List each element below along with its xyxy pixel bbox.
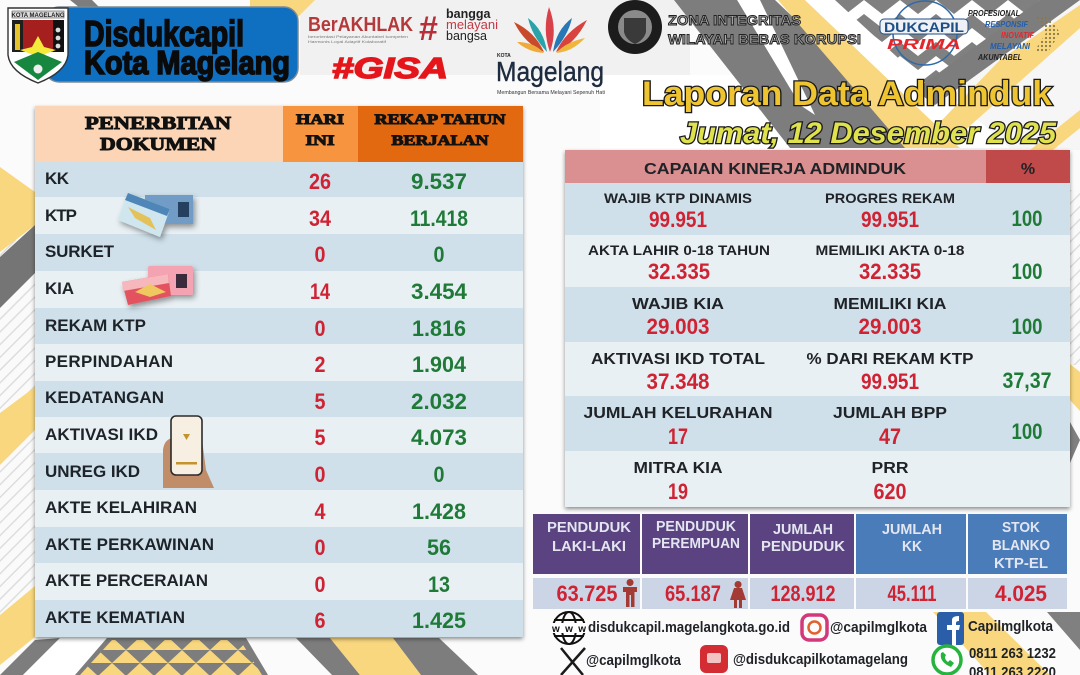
- row: KIA: [45, 279, 468, 304]
- subtitle: date: Jumat, 12 Desember 2025: [680, 117, 1057, 150]
- logo: Dukcapil Prima: PRIMA: [887, 36, 961, 53]
- row: KTP dinamis: 99.951: [649, 207, 707, 232]
- row: KIA: [632, 296, 1042, 339]
- logo: BerAKHLAK: bangga: [446, 7, 491, 21]
- row: UNREG IKD: 0: [434, 462, 444, 487]
- row: KTP dinamis: [604, 190, 1042, 232]
- header: penerbitan dokumen: DOKUMEN: [100, 134, 216, 154]
- cell: penduduk laki-laki: [533, 514, 640, 609]
- row: AKTE PERCERAIAN: AKTE PERCERAIAN: [45, 571, 208, 590]
- icon: instagram: [802, 615, 827, 640]
- row: akta lahir: 100: [1012, 259, 1042, 284]
- row: AKTE PERCERAIAN: 0: [314, 572, 326, 597]
- text: X: @capilmglkota: [586, 652, 682, 669]
- logo: Kota Magelang: Membangun Bersama Melayani Sepenuh Hati: [497, 90, 605, 96]
- logo: BerAKHLAK: melayani: [446, 18, 498, 32]
- logo: Kota Magelang: [496, 7, 605, 96]
- row: aktivasi IKD: [591, 351, 1052, 394]
- logo: Dukcapil Prima: DUKCAPIL: [884, 19, 964, 35]
- cell: jumlah KK: JUMLAH: [882, 521, 942, 538]
- heading: Kota Magelang: Kota Magelang: [84, 44, 290, 81]
- title: Laporan Data Adminduk: Laporan Data Adminduk: [642, 75, 1052, 113]
- header: capaian kinerja: [565, 150, 986, 183]
- text: instagram: @capilmglkota: [830, 619, 928, 636]
- row: aktivasi IKD: % DARI REKAM KTP: [806, 351, 974, 368]
- cell: stok blanko: 4.025: [995, 581, 1047, 606]
- cell: penduduk laki-laki: PENDUDUK: [547, 519, 631, 536]
- icon: phone in hand: [163, 416, 214, 488]
- icon: halftone chevron: [1034, 15, 1060, 52]
- row: AKTE KELAHIRAN: [45, 498, 466, 524]
- row: akta lahir: MEMILIKI AKTA 0-18: [816, 242, 965, 258]
- row: KK: [45, 169, 467, 194]
- row: KEDATANGAN: 5: [314, 389, 326, 414]
- logo: BerAKHLAK: bangsa: [446, 29, 487, 43]
- row: AKTE KEMATIAN: [45, 608, 466, 633]
- text: youtube: @disdukcapilkotamagelang: [733, 651, 908, 668]
- cell: jumlah penduduk: 128.912: [770, 581, 836, 606]
- row: akta lahir: AKTA LAHIR 0-18 TAHUN: [588, 242, 770, 258]
- row: SURKET: SURKET: [45, 242, 115, 261]
- row: mitra: PRR: [872, 460, 909, 477]
- header: penerbitan dokumen: PENERBITAN: [85, 113, 231, 133]
- logo: BerAKHLAK: #: [419, 10, 438, 48]
- cell: stok blanko: BLANKO: [992, 537, 1050, 554]
- row: KIA: 14: [310, 279, 331, 304]
- header: percent: %: [1021, 161, 1035, 178]
- row: KIA: KIA: [45, 279, 74, 298]
- row: KTP: KTP: [45, 206, 77, 225]
- header: rekap tahun berjalan: REKAP TAHUN: [374, 112, 506, 128]
- row: KIA: WAJIB KIA: [632, 296, 724, 313]
- row: KIA: 29.003: [646, 314, 710, 339]
- icon: website globe: [551, 612, 587, 644]
- row: AKTIVASI IKD: 4.073: [411, 425, 467, 450]
- row: SURKET: 0: [314, 242, 326, 267]
- text: values list: RESPONSIF: [985, 20, 1029, 29]
- cell: stok blanko: [968, 514, 1067, 609]
- row: UNREG IKD: 0: [314, 462, 326, 487]
- row: kelurahan: JUMLAH BPP: [833, 405, 947, 422]
- text: values list: INOVATIF: [1001, 31, 1035, 40]
- row: KTP: 34: [309, 206, 332, 231]
- row: KEDATANGAN: [45, 388, 467, 414]
- row: KEDATANGAN: 2.032: [411, 389, 467, 414]
- header: rekap tahun berjalan: [358, 106, 523, 162]
- header: hari ini: [283, 106, 358, 162]
- cell: jumlah KK: KK: [902, 538, 922, 555]
- row: mitra: MITRA KIA: [634, 460, 723, 477]
- row: AKTIVASI IKD: 5: [314, 425, 326, 450]
- row: mitra: 19: [668, 479, 688, 504]
- row: aktivasi IKD: 37,37: [1002, 368, 1052, 393]
- cell: penduduk laki-laki: LAKI-LAKI: [552, 538, 626, 555]
- text: zona integritas: WILAYAH BEBAS KORUPSI: [668, 31, 861, 47]
- row: KTP: 11.418: [410, 206, 468, 231]
- cell: stok blanko: STOK: [1002, 519, 1040, 536]
- icon: city shield: [8, 8, 68, 83]
- row: aktivasi IKD: AKTIVASI IKD TOTAL: [591, 351, 765, 368]
- cell: jumlah penduduk: PENDUDUK: [761, 538, 845, 555]
- row: KTP dinamis: 99.951: [861, 207, 919, 232]
- row: AKTE PERKAWINAN: [45, 535, 451, 560]
- row: SURKET: 0: [434, 242, 444, 267]
- header: penerbitan dokumen: [35, 106, 283, 162]
- row: KTP dinamis: PROGRES REKAM: [825, 190, 955, 206]
- logo: BerAKHLAK: [308, 7, 498, 48]
- cell: penduduk perempuan: 65.187: [665, 581, 721, 606]
- heading: Disdukcapil: Disdukcapil: [84, 13, 244, 54]
- row: akta lahir: 32.335: [648, 259, 710, 284]
- row: AKTE PERCERAIAN: [45, 571, 450, 597]
- row: akta lahir: [588, 242, 1042, 284]
- cell: stok blanko: KTP-EL: [994, 555, 1048, 572]
- row: AKTIVASI IKD: [45, 425, 467, 450]
- cell: penduduk perempuan: PEREMPUAN: [652, 535, 740, 552]
- row: AKTE PERKAWINAN: AKTE PERKAWINAN: [45, 535, 214, 554]
- cell: penduduk perempuan: [642, 514, 748, 609]
- row: AKTE PERKAWINAN: 0: [314, 535, 326, 560]
- logo: Dukcapil Prima: [880, 1, 968, 65]
- row: AKTE KEMATIAN: 6: [314, 608, 326, 633]
- row: kelurahan: 47: [879, 424, 901, 449]
- row: kelurahan: JUMLAH KELURAHAN: [584, 405, 772, 422]
- cell: jumlah penduduk: [750, 514, 854, 609]
- row: mitra: 620: [874, 479, 906, 504]
- logo: BerAKHLAK: berorientasi Pelayanan Akuntabel kompeten: [308, 34, 408, 39]
- logo: Kota Magelang: Magelang: [496, 56, 604, 87]
- panel: capaian kinerja adminduk table: [565, 150, 1070, 507]
- text: phone numbers: 0811 263 1232: [969, 645, 1056, 662]
- row: SURKET: [45, 242, 444, 267]
- cell: jumlah KK: [856, 514, 966, 609]
- logo: Kota Magelang: KOTA: [497, 53, 511, 59]
- header: percent: [986, 150, 1070, 183]
- logo: BerAKHLAK: BerAKHLAK: [308, 14, 413, 36]
- icon: youtube: [700, 645, 728, 673]
- text: zona integritas: ZONA INTEGRITAS: [668, 12, 801, 28]
- row: akta lahir: 32.335: [859, 259, 921, 284]
- row: kelurahan: [584, 405, 1042, 449]
- icon: KIA cards: [122, 266, 193, 305]
- row: aktivasi IKD: 37.348: [646, 369, 710, 394]
- header: Disdukcapil banner: [45, 7, 298, 82]
- row: AKTE KELAHIRAN: AKTE KELAHIRAN: [45, 498, 197, 517]
- header: capaian kinerja: CAPAIAN KINERJA ADMINDUK: [644, 161, 906, 178]
- text: zona integritas: [668, 12, 861, 47]
- text: values list: [968, 9, 1035, 62]
- row: KK: 9.537: [411, 169, 467, 194]
- cell: jumlah penduduk: JUMLAH: [773, 521, 833, 538]
- row: UNREG IKD: UNREG IKD: [45, 462, 140, 481]
- row: AKTIVASI IKD: AKTIVASI IKD: [45, 425, 158, 444]
- row: aktivasi IKD: 99.951: [861, 369, 919, 394]
- header: hari ini: HARI: [296, 112, 344, 128]
- header: hari ini: INI: [306, 133, 335, 149]
- row: KEDATANGAN: KEDATANGAN: [45, 388, 164, 407]
- text: website: disdukcapil.magelangkota.go.id: [588, 619, 790, 636]
- row: REKAM KTP: 1.816: [412, 316, 466, 341]
- cell: penduduk perempuan: PENDUDUK: [656, 518, 736, 535]
- row: REKAM KTP: REKAM KTP: [45, 316, 146, 335]
- icon: facebook: [937, 612, 964, 645]
- row: REKAM KTP: 0: [314, 316, 326, 341]
- icon: KTP cards: [118, 193, 193, 237]
- row: PERPINDAHAN: 1.904: [412, 352, 467, 377]
- row: KIA: 100: [1012, 314, 1042, 339]
- row: PERPINDAHAN: PERPINDAHAN: [45, 352, 173, 371]
- icon: website globe: www: [551, 624, 586, 635]
- row: KTP: [45, 206, 468, 231]
- row: KTP dinamis: 100: [1012, 206, 1042, 231]
- panel: population summary: [533, 514, 1067, 609]
- text: phone numbers: [969, 645, 1056, 675]
- text: values list: MELAYANI: [990, 42, 1031, 51]
- row: AKTE KELAHIRAN: 4: [314, 499, 326, 524]
- text: facebook: Capilmglkota: [968, 618, 1054, 635]
- text: values list: AKUNTABEL: [977, 53, 1022, 62]
- row: REKAM KTP: [45, 316, 466, 341]
- logo: zona integritas badge: [608, 0, 662, 54]
- row: kelurahan: 17: [668, 424, 688, 449]
- header: rekap tahun berjalan: BERJALAN: [392, 133, 489, 149]
- row: mitra: [634, 460, 909, 504]
- row: KIA: 29.003: [858, 314, 922, 339]
- row: AKTE PERKAWINAN: 56: [427, 535, 451, 560]
- cell: jumlah KK: 45.111: [888, 581, 936, 606]
- row: KIA: MEMILIKI KIA: [834, 296, 947, 313]
- row: PERPINDAHAN: 2: [314, 352, 326, 377]
- logo: BerAKHLAK: Harmonis Loyal Adaptif Kolaboratif: [308, 39, 387, 44]
- text: values list: PROFESIONAL: [968, 9, 1020, 18]
- icon: X: [561, 648, 585, 675]
- row: KTP dinamis: WAJIB KTP DINAMIS: [604, 190, 752, 206]
- panel: penerbitan dokumen table: [35, 106, 523, 637]
- row: KK: 26: [309, 169, 331, 194]
- cell: penduduk laki-laki: 63.725: [556, 581, 618, 606]
- row: PERPINDAHAN: [45, 352, 467, 377]
- row: AKTE KELAHIRAN: 1.428: [412, 499, 466, 524]
- row: kelurahan: 100: [1012, 419, 1042, 444]
- row: AKTE KEMATIAN: 1.425: [412, 608, 466, 633]
- logo: #GISA: #GISA: [332, 53, 448, 85]
- icon: whatsapp: [933, 646, 961, 674]
- row: KIA: 3.454: [411, 279, 468, 304]
- row: AKTE PERCERAIAN: 13: [428, 572, 450, 597]
- row: UNREG IKD: [45, 462, 444, 487]
- icon: city shield: KOTA MAGELANG: [12, 13, 65, 19]
- row: KK: KK: [45, 169, 70, 188]
- row: AKTE KEMATIAN: AKTE KEMATIAN: [45, 608, 185, 627]
